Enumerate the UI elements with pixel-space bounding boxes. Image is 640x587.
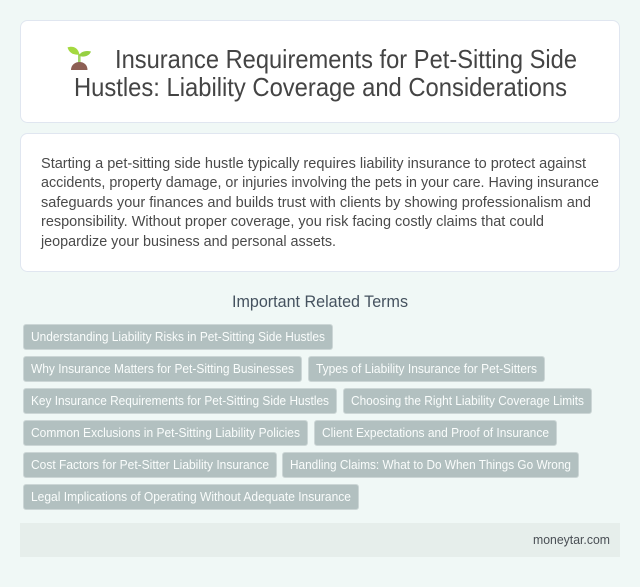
text block: summary: jeopardize your business and personal assets.: [40, 233, 336, 250]
tag: Client Expectations and Proof of Insurance: [322, 425, 549, 440]
tag: [24, 420, 308, 446]
text block: summary: Starting a pet-sitting side hustle typically requires liability insurance to protect against: [41, 155, 587, 172]
tag: [24, 484, 358, 510]
heading: related terms: Important Related Terms: [232, 293, 408, 311]
tag: [344, 388, 592, 414]
tag: Common Exclusions in Pet-Sitting Liability Policies: [31, 425, 300, 440]
title: [74, 44, 577, 102]
tags: related terms: [24, 324, 592, 510]
text block: summary: [40, 155, 599, 250]
text block: summary: responsibility. Without proper coverage, you risk facing costly claims that could: [41, 213, 544, 230]
tag: [308, 356, 544, 382]
title: Hustles: Liability Coverage and Considerations: [74, 72, 567, 102]
tag: Key Insurance Requirements for Pet-Sitting Side Hustles: [31, 393, 329, 408]
tag: Understanding Liability Risks in Pet-Sitting Side Hustles: [31, 329, 325, 344]
footer: site name: moneytar.com: [533, 532, 610, 547]
panel: summary card: [20, 134, 620, 272]
title: Insurance Requirements for Pet-Sitting Side: [115, 44, 577, 74]
tag: Choosing the Right Liability Coverage Limits: [351, 393, 584, 408]
tag: Why Insurance Matters for Pet-Sitting Businesses: [31, 361, 294, 376]
panel: title card: [20, 20, 620, 122]
tag: [24, 452, 276, 478]
tag: [314, 420, 556, 446]
footer: [20, 523, 620, 557]
tag: Handling Claims: What to Do When Things Go Wrong: [290, 457, 571, 472]
text block: summary: safeguards your finances and builds trust with clients by showing professionalism and: [41, 194, 591, 211]
text block: summary: accidents, property damage, or injuries involving the pets in your care. Having insurance: [41, 174, 599, 191]
icon: sprout: [68, 47, 91, 70]
tag: Legal Implications of Operating Without Adequate Insurance: [31, 489, 351, 504]
tag: [24, 388, 336, 414]
tag: [282, 452, 578, 478]
tag: Cost Factors for Pet-Sitter Liability Insurance: [31, 457, 269, 472]
tag: [24, 356, 302, 382]
tag: [24, 324, 332, 350]
tag: Types of Liability Insurance for Pet-Sitters: [316, 361, 537, 376]
